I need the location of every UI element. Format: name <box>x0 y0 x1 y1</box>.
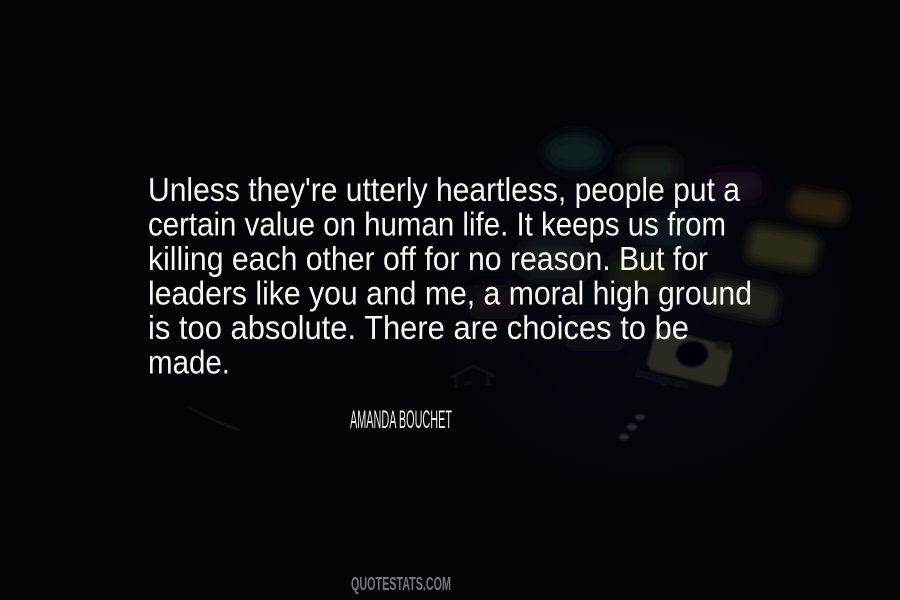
icon: house outline <box>450 366 495 388</box>
icon: camera app <box>646 328 734 388</box>
icon: purple app <box>708 172 762 200</box>
quote line 4: leaders like you and me, a moral high ground <box>148 274 752 312</box>
icon: red app <box>470 285 520 319</box>
quote line 1: Unless they're utterly heartless, people put a <box>148 171 741 208</box>
icon: blue app <box>640 215 700 251</box>
icon: three dots <box>619 414 645 440</box>
icon: yellow app <box>745 224 821 272</box>
label: blurred app name: Instagram <box>634 365 689 392</box>
phone edge highlight <box>188 407 240 430</box>
icon: olive app <box>622 152 678 184</box>
quote line 6: made. <box>148 344 230 380</box>
quote line 5: is too absolute. There are choices to be <box>148 309 689 346</box>
icon: teal app <box>545 134 605 170</box>
source credit: QUOTESTATS.COM <box>351 574 451 594</box>
icon: olive lower app <box>610 255 672 291</box>
quote line 2: certain value on human life. It keeps us from <box>148 206 726 242</box>
icon: amber app <box>788 187 848 225</box>
blurred phone screen with app icons <box>188 110 860 490</box>
icon: navy app <box>565 315 625 351</box>
icon: green grey app <box>522 240 588 278</box>
text: AMANDA BOUCHET <box>350 406 452 434</box>
quote text <box>148 171 752 380</box>
quote line 3: killing each other off for no reason. But for <box>148 240 708 277</box>
icon: beige app <box>703 275 781 323</box>
